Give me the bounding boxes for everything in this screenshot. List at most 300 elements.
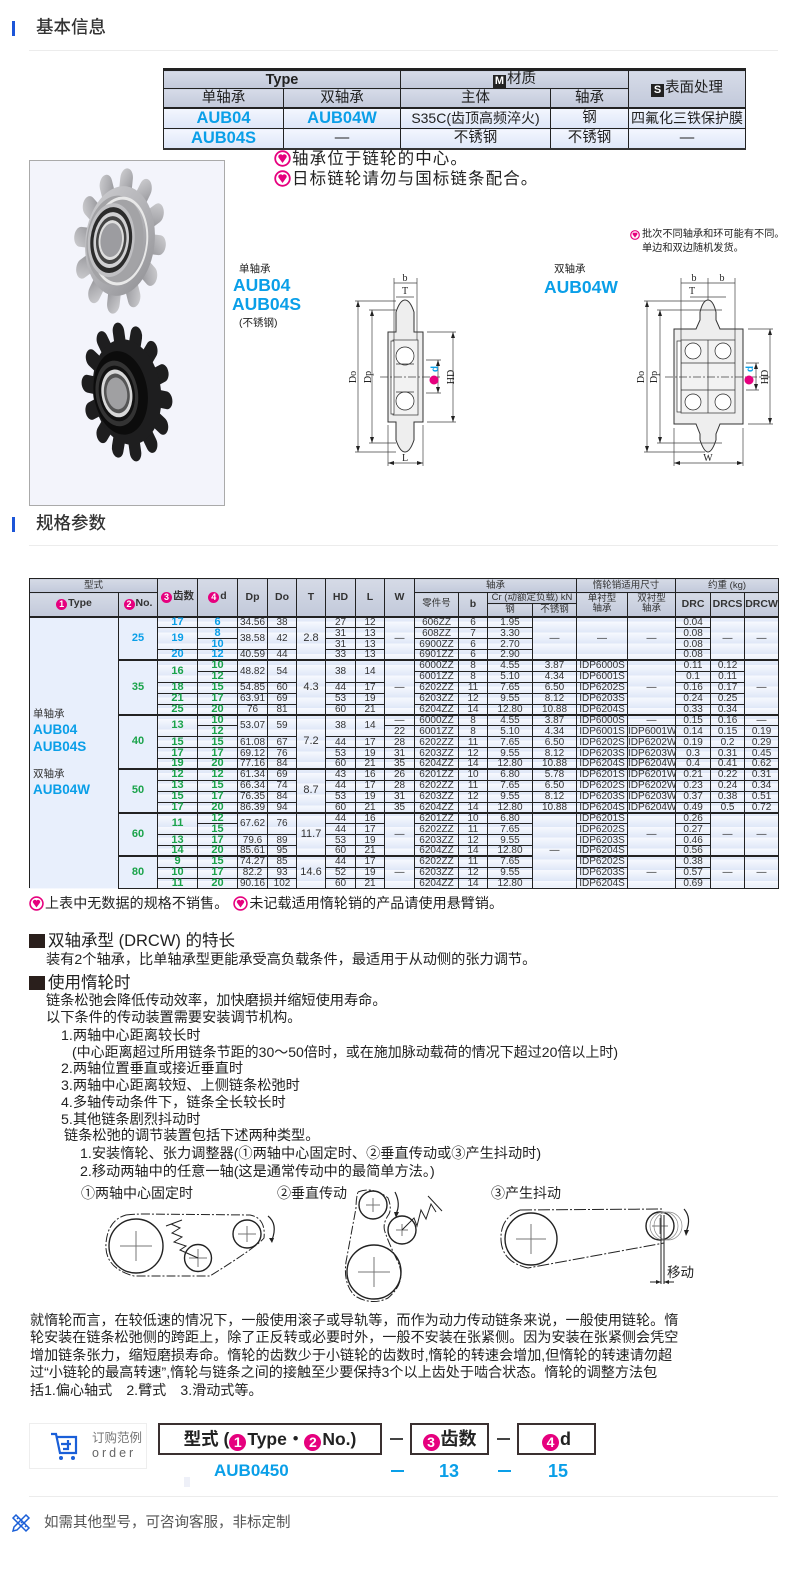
specification table: 25 [171, 702, 184, 714]
specification table: IDP6001S [579, 726, 625, 736]
specification table: 44 [335, 682, 346, 693]
specification table: 20 [211, 844, 224, 856]
text block: idler explanation paragraph [30, 1312, 678, 1398]
specification table: 3.30 [500, 628, 520, 638]
specification table: 6203ZZ [419, 748, 454, 758]
specification table: 双衬型 [637, 593, 666, 604]
specification table: 6204ZZ [419, 704, 454, 714]
specification table: 60 [276, 682, 288, 693]
specification table: 10.88 [542, 704, 567, 714]
specification table: 42 [276, 633, 288, 644]
material and type table: 轴承 [575, 90, 604, 106]
specification table: 76 [276, 818, 288, 829]
specification table: 7.65 [500, 824, 520, 834]
material and type table: 不锈钢 [568, 130, 611, 146]
specification table: 6 [470, 617, 476, 628]
specification table: 10 [467, 769, 479, 780]
drawing: single bearing sprocket: b [402, 273, 408, 284]
labels: double bearing: AUB04W [544, 277, 618, 297]
text block: using idlers: 2.移动两轴中的任意一轴(这是通常传动中的最简单方法。) [80, 1164, 435, 1180]
material and type table: 主体 [461, 90, 490, 106]
specification table: 6202ZZ [419, 824, 454, 834]
specification table: 86.39 [240, 802, 265, 812]
specification table: 19 [364, 748, 376, 758]
material and type table: 表面处理 [665, 80, 723, 96]
specification table: 19 [364, 867, 376, 878]
material and type table [163, 68, 746, 150]
specification table: 0.25 [718, 693, 737, 704]
specification table: 21 [364, 758, 376, 769]
specification table: 12 [211, 648, 224, 660]
material and type table: S [654, 84, 661, 96]
diagram: vertical drive pulleys: ②垂直传动 [277, 1185, 347, 1201]
specification table: 0.57 [683, 867, 703, 878]
specification table: IDP6203S [579, 867, 625, 878]
material and type table: AUB04 [196, 109, 251, 127]
specification table: 0.56 [683, 845, 703, 856]
specification table: 7.65 [500, 856, 520, 867]
specification table: 6202ZZ [419, 736, 454, 748]
specification table: 14 [364, 666, 376, 677]
specification table: 14 [467, 758, 479, 769]
specification table: 12 [211, 812, 224, 824]
specification table: IDP6202S [579, 736, 625, 748]
diagram: vibration pulleys: 移动 [667, 1265, 694, 1280]
specification table: 11 [172, 876, 183, 888]
material and type table: — [335, 130, 349, 146]
specification table: 15 [171, 790, 184, 802]
specification table: 0.3 [686, 748, 700, 758]
specification table: 76 [247, 704, 258, 714]
specification table: 17 [211, 834, 224, 846]
specification table: 0.33 [683, 704, 703, 714]
specification table: 17 [364, 682, 376, 693]
specification table: — [723, 633, 733, 644]
specification table: — [395, 829, 405, 840]
specification table: 35 [132, 681, 144, 693]
specification table: 85 [276, 856, 288, 867]
specification table: AUB04 [33, 722, 77, 736]
specification table: 12 [467, 748, 479, 758]
icon: shopping cart [51, 1432, 78, 1460]
specification table: IDP6203S [579, 748, 625, 758]
specification table: 0.21 [683, 769, 703, 780]
order example values: AUB0450 [214, 1461, 289, 1480]
specification table: 54 [276, 666, 288, 677]
labels: single bearing [232, 263, 301, 329]
specification table: 14 [467, 802, 479, 812]
specification table: 0.24 [718, 780, 737, 791]
specification table: — [757, 715, 767, 726]
section heading: specifications: 规格参数 [36, 513, 106, 533]
specification table: Cr (动额定负载) kN [492, 592, 572, 603]
specification table: 约重 (kg) [708, 580, 746, 590]
specification table: 6204ZZ [419, 878, 454, 888]
specification table: 0.37 [683, 791, 703, 802]
material and type table: S35C(齿顶高频淬火) [411, 110, 540, 126]
specification table: 0.11 [718, 671, 737, 682]
specification table: 10 [211, 659, 224, 671]
specification table: 20 [211, 876, 224, 888]
text block: using idlers: 1.两轴中心距离较长时 [61, 1028, 201, 1044]
specification table: d [220, 590, 227, 602]
specification table: 0.2 [721, 736, 734, 748]
box: type and number [158, 1423, 382, 1455]
specification table: 14 [171, 844, 184, 856]
specification table: 14 [467, 845, 479, 856]
material and type table: — [680, 130, 694, 146]
specification table: 3 [164, 592, 169, 602]
text block: using idlers: 3.两轴中心距离较短、上侧链条松弛时 [61, 1078, 300, 1094]
specification table: 89 [276, 834, 288, 846]
specification table: DRCS [713, 598, 742, 610]
specification table: 14 [467, 878, 479, 888]
specification table: IDP6203S [579, 693, 625, 704]
specification table: 6202ZZ [419, 780, 454, 791]
specification table: 10 [211, 714, 224, 726]
specification table: 双轴承 [33, 768, 64, 780]
specification table: 12 [211, 670, 224, 682]
specification table: Type [68, 597, 92, 609]
specification table: AUB04S [33, 739, 86, 754]
box: d: d [560, 1429, 571, 1449]
order code boxes [158, 1423, 596, 1455]
text block: idler explanation paragraph: 过“小链轮的最高转速”,惰轮与链条之间的接触至少要保持3个以上齿处于啮合状态。惰轮的调整方法包 [30, 1364, 657, 1380]
specification table: 型式 [84, 580, 103, 590]
specification table: IDP6201S [579, 769, 625, 780]
specification table: 26 [394, 769, 405, 780]
specification table: 12 [211, 768, 224, 780]
note: batch bearing: 单边和双边随机发货。 [642, 243, 744, 254]
specification table: 38 [276, 617, 288, 628]
specification table: IDP6203S [579, 791, 625, 802]
specification table: 6.50 [545, 736, 564, 748]
specification table: 0.26 [683, 813, 703, 824]
specification table: 11 [468, 682, 478, 693]
specification table: 8 [470, 660, 476, 671]
specification table: 85.61 [240, 845, 265, 856]
drawing: double bearing sprocket [636, 273, 773, 466]
specification table: 25 [132, 632, 144, 644]
specification table: 53 [335, 791, 346, 802]
specification table: 606ZZ [422, 617, 451, 628]
specification table: 5.10 [500, 671, 520, 682]
material and type table: 不锈钢 [454, 130, 497, 146]
specification table: 0.38 [718, 791, 737, 802]
diagram: vibration pulleys [491, 1185, 694, 1284]
drawing: single bearing sprocket: T [402, 286, 408, 297]
specification table: b [470, 598, 476, 610]
text block: using idlers: 链条松弛会降低传动效率，加快磨损并缩短使用寿命。 [46, 993, 387, 1009]
labels: single bearing: AUB04S [232, 294, 301, 314]
material and type table: 材质 [507, 71, 536, 87]
specification table: 轴承 [593, 603, 612, 614]
specification table: 13 [364, 628, 376, 638]
specification table: IDP6202W [628, 780, 676, 791]
drawing: double bearing sprocket: b [692, 273, 696, 284]
specification table: IDP6000S [579, 660, 625, 671]
order example badge: 订购范例 [92, 1431, 142, 1445]
specification table: 31 [335, 628, 346, 638]
specification table: 40 [132, 735, 144, 747]
specification table: 76 [276, 748, 288, 758]
specification table: 22 [394, 726, 405, 736]
drawing: single bearing sprocket [348, 273, 457, 466]
specification table: 4.55 [500, 660, 520, 671]
specification table: 61.34 [240, 769, 265, 780]
specification table: 19 [364, 693, 376, 704]
specification table: 15 [211, 681, 224, 693]
specification table: 50 [132, 784, 144, 796]
specification table: IDP6001W [628, 726, 676, 736]
specification table: 8 [470, 671, 476, 682]
specification table: 93 [276, 867, 288, 878]
text block: using idlers: 5.其他链条剧烈抖动时 [61, 1112, 201, 1128]
specification table: 0.51 [752, 791, 771, 802]
text block: double bearing features [29, 932, 536, 968]
specification table: 17 [171, 746, 184, 758]
specification table: 6201ZZ [419, 769, 454, 780]
specification table: 2.8 [303, 632, 319, 644]
specification table: 6900ZZ [419, 638, 454, 650]
specification table: 20 [171, 648, 184, 660]
specification table: 4.34 [545, 726, 564, 736]
specification table: 0.23 [683, 780, 703, 791]
specification table: 9.55 [500, 693, 520, 704]
specification table: 0.29 [752, 736, 771, 748]
drawing: double bearing sprocket: b [720, 273, 724, 284]
specification table: 14 [467, 704, 479, 714]
specification table: 12 [467, 791, 479, 802]
product photo panel [29, 160, 225, 506]
specification table: — [757, 682, 767, 693]
text block: idler explanation paragraph: 括1.偏心轴式 2.臂式 3.滑动式等。 [30, 1382, 263, 1398]
drawing: single bearing sprocket: d [430, 366, 441, 372]
specification table: 608ZZ [422, 628, 451, 638]
specification table: 11.7 [301, 828, 321, 840]
specification table: 16 [364, 769, 376, 780]
specification table: — [395, 867, 405, 878]
specification table: 11 [468, 736, 478, 748]
box: teeth: 3 [427, 1434, 435, 1450]
specification table: 2 [127, 599, 132, 609]
specification table: 53 [335, 693, 346, 704]
specification table: — [647, 867, 657, 878]
specification table: DRCW [745, 598, 778, 610]
specification table: 48.82 [240, 666, 265, 677]
specification table: IDP6204S [579, 704, 625, 714]
specification table: 10.88 [542, 802, 567, 812]
text block: using idlers: (中心距离超过所用链条节距的30～50倍时，或在施加脉动载荷的情况下超过20倍以上时) [72, 1044, 618, 1060]
specification table: IDP6204W [628, 802, 676, 812]
specification table: 0.31 [718, 748, 737, 758]
specification table: 7.65 [500, 780, 520, 791]
specification table: 5.10 [500, 726, 520, 736]
specification table: 35 [394, 758, 405, 769]
specification table: 17 [364, 736, 376, 748]
specification table [29, 578, 779, 888]
specification table: 0.11 [684, 660, 702, 671]
specification table: — [647, 633, 657, 644]
specification table: 6.50 [545, 780, 564, 791]
specification table: IDP6001S [579, 671, 625, 682]
specification table: 94 [276, 802, 288, 812]
specification table: 9.55 [500, 791, 520, 802]
specification table: 6.50 [545, 682, 564, 693]
specification table: 19 [364, 834, 376, 846]
specification table: 7.2 [303, 735, 319, 747]
specification table: 0.22 [718, 769, 737, 780]
specification table: 60 [335, 704, 346, 714]
specification table: 12 [364, 617, 376, 628]
specification table: 10.88 [542, 758, 567, 769]
specification table: 69.12 [240, 748, 265, 758]
specification table: 60 [335, 845, 346, 856]
note: bearing position: 轴承位于链轮的中心。 [292, 150, 468, 168]
specification table: 4.3 [303, 681, 319, 693]
specification table: 9 [174, 855, 181, 867]
specification table: 0.34 [718, 704, 737, 714]
drawing: single bearing sprocket: HD [446, 370, 457, 384]
specification table: 6203ZZ [419, 693, 454, 704]
order example badge: order [92, 1446, 136, 1460]
specification table: 34.56 [240, 617, 265, 628]
specification table: 0.19 [752, 726, 771, 736]
specification table: 17 [211, 692, 224, 704]
specification table: 0.08 [683, 628, 703, 638]
specification table: 11 [468, 856, 478, 867]
labels: double bearing: 双轴承 [554, 263, 586, 275]
box: teeth [410, 1423, 489, 1455]
specification table: 4 [211, 592, 216, 602]
specification table: 6203ZZ [419, 867, 454, 878]
drawing: single bearing sprocket: Dp [363, 371, 374, 383]
specification table: 7.65 [500, 736, 520, 748]
specification table: 38 [335, 720, 346, 731]
specification table: 6 [470, 638, 476, 650]
note: sprocket standard: 日标链轮请勿与国标链条配合。 [292, 170, 538, 188]
labels: single bearing: AUB04 [233, 275, 290, 295]
specification table: 2.90 [500, 649, 520, 660]
specification table: IDP6202S [579, 824, 625, 834]
specification table: 20 [211, 757, 224, 769]
specification table: IDP6203W [628, 748, 676, 758]
drawing: single bearing sprocket: Do [348, 371, 359, 383]
box: d [517, 1423, 596, 1455]
specification table: 0.69 [683, 878, 703, 888]
specification table: 3.87 [545, 660, 564, 671]
specification table: 80 [132, 866, 144, 878]
specification table: 单轴承 [33, 708, 64, 720]
specification table: 轴承 [642, 603, 661, 614]
material and type table: 钢 [582, 110, 597, 126]
specification table: 10 [467, 813, 479, 824]
text block: using idlers: 2.两轴位置垂直或接近垂直时 [61, 1061, 243, 1077]
specification table: 15 [211, 779, 224, 791]
specification table: — [550, 845, 560, 856]
specification table: 0.16 [683, 682, 703, 693]
specification table: 10 [171, 866, 184, 878]
material and type table: 四氟化三铁保护膜 [631, 110, 743, 126]
specification table: 13 [364, 638, 376, 650]
specification table: 7.65 [500, 682, 520, 693]
specification table: 28 [394, 780, 405, 791]
specification table: HD [333, 591, 348, 603]
specification table: 0.15 [718, 726, 737, 736]
specification table: 6204ZZ [419, 845, 454, 856]
specification table: — [395, 715, 405, 726]
specification table: 17 [211, 790, 224, 802]
specification table: 4.34 [545, 671, 564, 682]
text block: idler explanation paragraph: 轮安装在链条松弛侧的跨距上，除了正反转或必要时外，一般不安装在张紧侧。因为安装在张紧侧会凭空 [30, 1329, 678, 1345]
specification table: 17 [211, 746, 224, 758]
specification table: IDP6204W [628, 758, 676, 769]
specification table: 21 [364, 802, 376, 812]
specification table: — [647, 829, 657, 840]
specification table: 33 [335, 649, 346, 660]
specification table: 0.14 [683, 726, 703, 736]
specification table: 0.08 [683, 649, 703, 660]
specification table: 102 [274, 878, 290, 888]
specification table: 67.62 [240, 818, 265, 829]
box: type and number: 1 [234, 1434, 242, 1450]
specification table: 60 [335, 758, 346, 769]
specification table: T [308, 591, 314, 603]
specification table: 0.1 [686, 671, 700, 682]
specification table: 74.27 [240, 856, 265, 867]
specification table: 6000ZZ [419, 715, 454, 726]
specification table: 81 [276, 704, 288, 714]
specification table: 4.55 [500, 715, 520, 726]
specification table: 28 [394, 736, 405, 748]
material and type table: AUB04S [191, 129, 256, 147]
drawing: double bearing sprocket: T [689, 286, 695, 297]
specification table: 12.80 [498, 845, 523, 856]
drawing: double bearing sprocket: HD [760, 370, 771, 384]
specification table: 15 [211, 736, 224, 748]
specification table: 8 [214, 626, 221, 638]
specification table: 6201ZZ [419, 813, 454, 824]
specification table: 6 [214, 616, 221, 628]
specification table: 0.5 [721, 802, 734, 812]
material and type table: 双轴承 [320, 90, 364, 106]
specification table: 27 [335, 617, 346, 628]
specification table: IDP6203S [579, 834, 625, 846]
specification table: 3.87 [545, 715, 564, 726]
specification table: 44 [335, 780, 346, 791]
order example badge [29, 1423, 147, 1469]
text block: idler explanation paragraph: 增加链条张力，缩短磨损寿命。惰轮的齿数少于小链轮的齿数时,惰轮的转速会增加,但惰轮的转速请勿超 [30, 1347, 672, 1363]
specification table: IDP6201S [579, 813, 625, 824]
specification table: 8.7 [303, 784, 319, 796]
specification table: IDP6204S [579, 758, 625, 769]
footnotes under the specification table: 上表中无数据的规格不销售。 未记载适用惰轮销的产品请使用悬臂销。 [45, 895, 503, 911]
specification table: 6203ZZ [419, 834, 454, 846]
specification table: 6202ZZ [419, 682, 454, 693]
drawing: single bearing sprocket: L [402, 453, 408, 464]
material and type table: M [495, 75, 504, 87]
specification table: 18 [171, 681, 184, 693]
labels: single bearing: (不锈钢) [239, 317, 278, 329]
icon: sprockets [74, 168, 172, 462]
specification table: 21 [364, 878, 376, 888]
specification table: 63.91 [240, 693, 265, 704]
specification table: 31 [394, 748, 405, 758]
specification table: 10 [211, 638, 224, 650]
specification table: 0.72 [752, 802, 771, 812]
specification table: 1 [59, 599, 64, 609]
specification table: 16 [364, 813, 376, 824]
